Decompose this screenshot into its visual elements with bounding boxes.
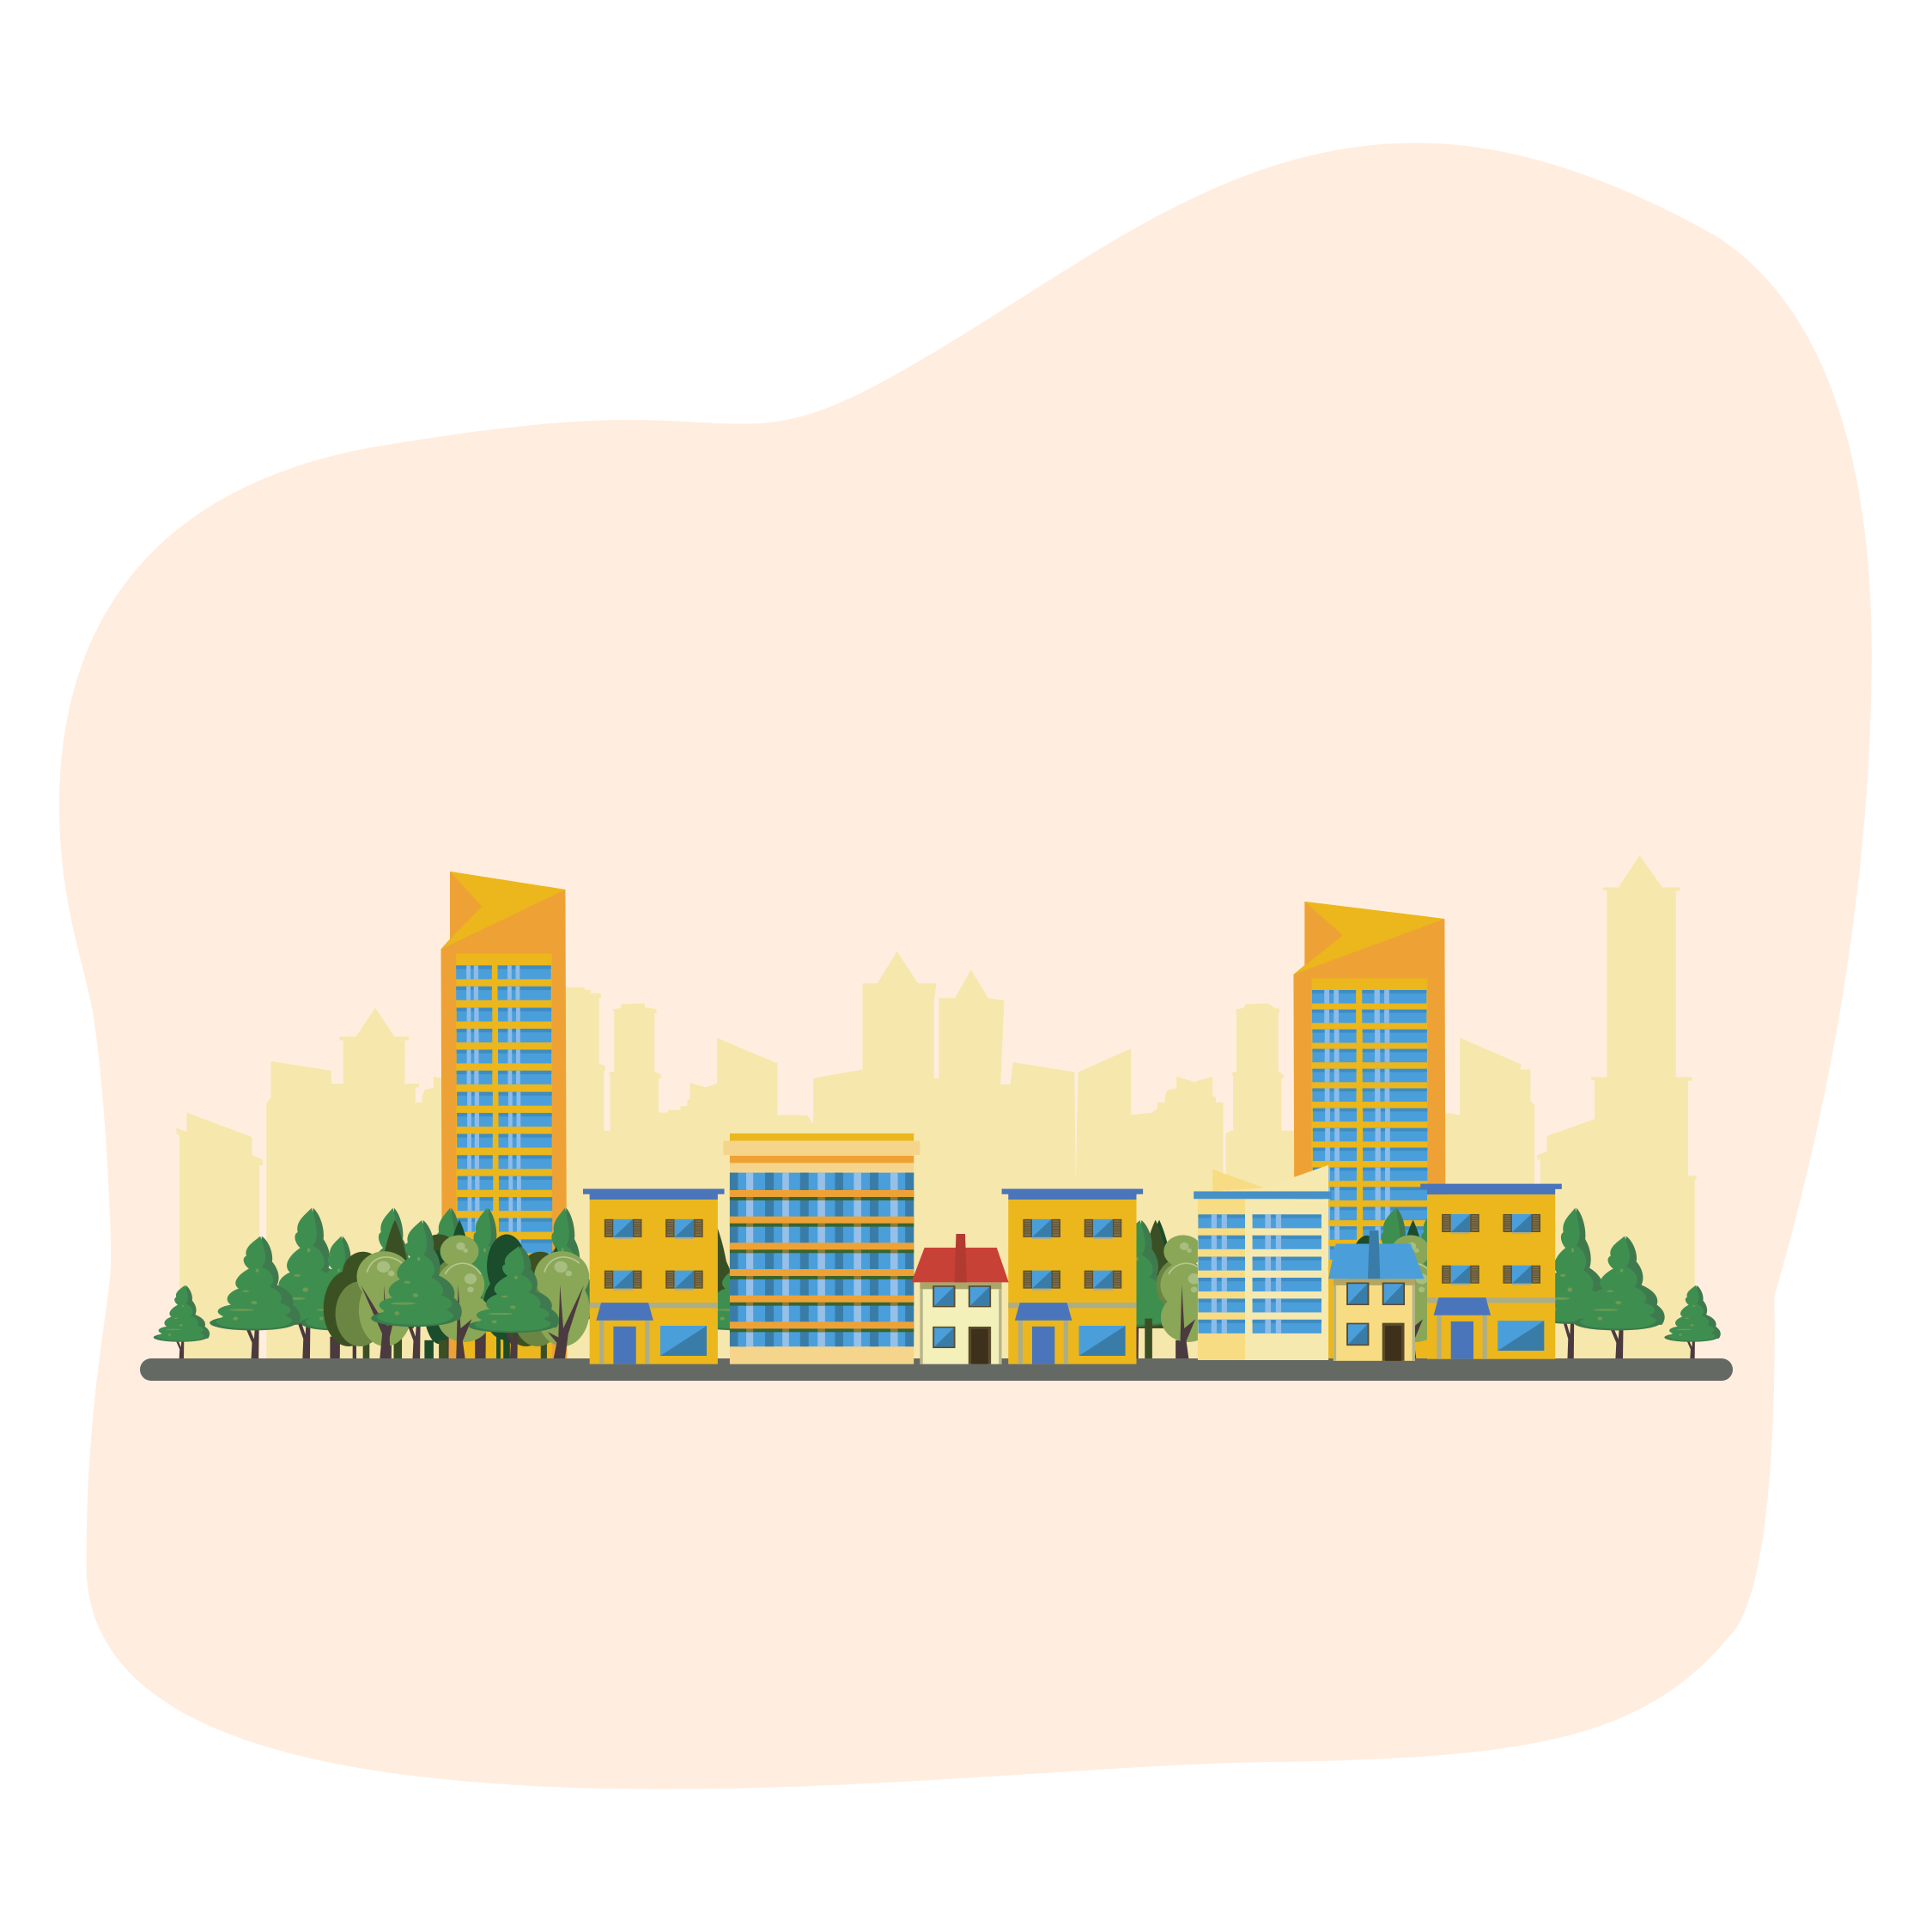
apartment building center right: [1002, 1188, 1143, 1364]
right tower: [1293, 902, 1446, 1359]
blue roof house: [1328, 1230, 1425, 1361]
pale office building: [1194, 1165, 1332, 1360]
apartment building left: [583, 1188, 725, 1364]
background blob: [59, 143, 1872, 1789]
road: [140, 1358, 1733, 1381]
left tower: [441, 872, 567, 1359]
right tree cluster: [1090, 1208, 1721, 1359]
apartment building far right: [1420, 1184, 1562, 1359]
central glass building: [723, 1133, 920, 1364]
red roof house: [911, 1234, 1009, 1364]
distant skyline silhouette: [176, 855, 1697, 1362]
left tree cluster: [154, 1208, 787, 1359]
